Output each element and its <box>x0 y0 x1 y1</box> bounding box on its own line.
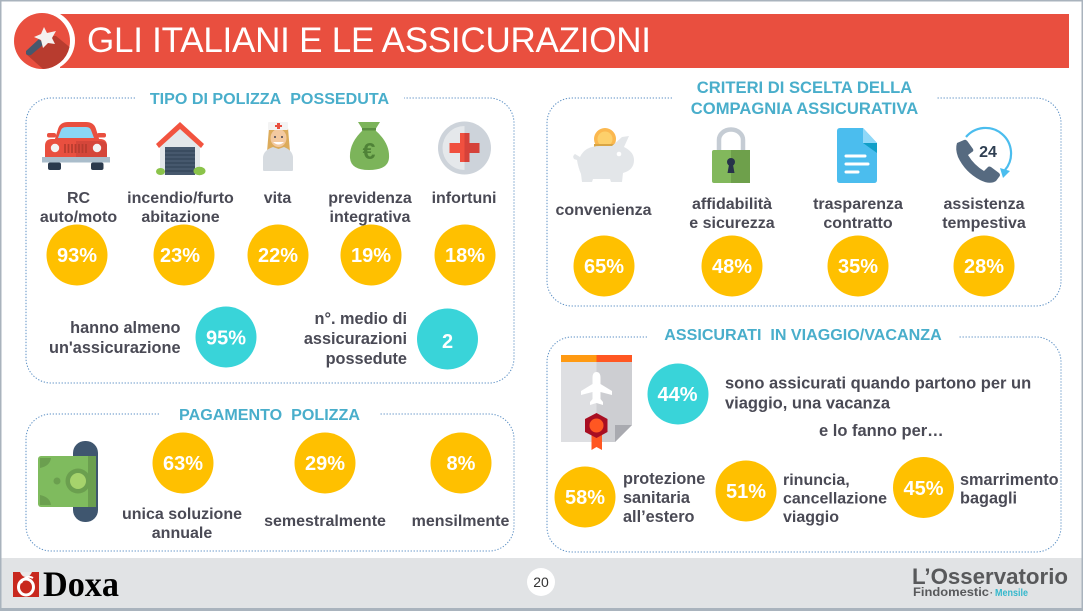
label: hanno almeno un'assicurazione: hanno almeno <box>70 319 180 337</box>
icon: money bag: € <box>363 138 376 164</box>
panel: assicurati in viaggio/vacanza <box>547 326 1061 552</box>
value: 23% <box>154 224 214 286</box>
label: unica soluzione annuale: annuale <box>152 525 212 542</box>
text: sono assicurati: sono assicurati quando partono per un <box>725 374 1031 392</box>
logo: L'Osservatorio Findomestic: L’Osservatorio <box>912 564 1068 589</box>
text: e lo fanno per: e lo fanno per… <box>819 422 944 440</box>
value: 8%: 8% <box>447 453 476 475</box>
value: 18% <box>434 224 496 286</box>
value: 65% <box>574 236 634 296</box>
label: RC auto/moto: auto/moto <box>40 209 117 226</box>
value: 8% <box>430 432 492 494</box>
value: 45%: 45% <box>903 478 944 500</box>
label: vita: vita <box>264 190 291 207</box>
label: rinuncia, cancellazione viaggio: cancellazione <box>783 490 887 508</box>
value: 29%: 29% <box>305 453 345 475</box>
value: 95%: 95% <box>206 328 246 350</box>
icon: car <box>42 122 110 170</box>
label: hanno almeno un'assicurazione: un'assicurazione <box>49 339 180 357</box>
value: 23%: 23% <box>160 245 200 267</box>
panel: tipo di polizza posseduta <box>26 90 514 383</box>
value: 29% <box>294 432 356 494</box>
label: trasparenza contratto: trasparenza <box>813 196 903 213</box>
value: 51% <box>716 460 776 522</box>
panel: pagamento polizza <box>26 406 514 551</box>
label: assistenza tempestiva: tempestiva <box>942 215 1026 232</box>
label: smarrimento bagagli: bagagli <box>960 490 1017 508</box>
value: 63% <box>152 432 214 494</box>
value: 93% <box>46 224 108 286</box>
label: semestralmente: semestralmente <box>264 513 386 530</box>
value: 2: 2 <box>442 331 453 353</box>
label: unica soluzione annuale: unica soluzione <box>122 506 242 523</box>
value: 44% <box>648 364 708 424</box>
logo: Doxa <box>13 564 119 604</box>
value: 58%: 58% <box>565 487 605 509</box>
icon: travel insurance document <box>561 355 632 450</box>
logo: L'Osservatorio Findomestic: Findomestic <box>913 585 989 599</box>
logo: L'Osservatorio Findomestic: · <box>990 588 993 598</box>
label: assistenza tempestiva: assistenza <box>944 196 1024 213</box>
logo: L'Osservatorio Findomestic: Mensile <box>995 587 1028 599</box>
value: 22% <box>248 224 308 286</box>
icon: piggy bank <box>573 128 634 182</box>
icon: phone 24h: 24 <box>979 144 997 161</box>
label: affidabilità e sicurezza: affidabilità <box>692 196 772 213</box>
value: 44%: 44% <box>657 384 698 406</box>
panel: criteri di scelta <box>547 78 1061 306</box>
page number <box>527 568 555 596</box>
heading: ASSICURATI IN VIAGGIO/VACANZA <box>664 326 942 344</box>
label: numero medio di assicurazioni: assicurazioni <box>304 330 407 348</box>
heading: TIPO DI POLIZZA POSSEDUTA <box>150 90 390 108</box>
label: incendio/furto abitazione: incendio/furto <box>127 190 234 207</box>
value: 28% <box>954 236 1014 296</box>
value: 22%: 22% <box>258 245 298 267</box>
label: infortuni: infortuni <box>432 190 496 207</box>
icon: first aid cross <box>438 122 491 174</box>
footer band <box>0 558 1083 611</box>
label: rinuncia, cancellazione viaggio: rinuncia, <box>783 472 850 489</box>
heading: CRITERI DI SCELTA DELLA <box>697 78 912 97</box>
logo: Doxa: Doxa <box>43 564 119 604</box>
heading: COMPAGNIA ASSICURATIVA <box>691 99 918 118</box>
value: 2 <box>417 308 478 370</box>
icon: nurse <box>263 122 293 171</box>
label: affidabilità e sicurezza: e sicurezza <box>689 215 775 232</box>
value: 48% <box>702 236 762 296</box>
label: protezione sanitaria all'estero: all’estero <box>623 508 695 526</box>
label: mensilmente: mensilmente <box>412 513 510 530</box>
icon: padlock <box>712 130 750 183</box>
value: 48%: 48% <box>712 256 752 278</box>
label: numero medio di assicurazioni: possedute <box>326 350 407 368</box>
title: GLI ITALIANI E LE ASSICURAZIONI <box>87 21 651 60</box>
label: RC auto/moto: RC <box>67 190 90 207</box>
value: 58% <box>554 466 616 528</box>
value: 19% <box>340 224 402 286</box>
value: 93%: 93% <box>57 245 97 267</box>
value: 65%: 65% <box>584 256 624 278</box>
label: trasparenza contratto: contratto <box>823 215 893 232</box>
label: protezione sanitaria all'estero: sanitaria <box>623 489 691 507</box>
label: rinuncia, cancellazione viaggio: viaggio <box>783 509 839 526</box>
icon: phone 24h <box>956 128 1011 183</box>
text: sono assicurati: viaggio, una vacanza <box>725 394 891 412</box>
value: 28%: 28% <box>964 256 1004 278</box>
label: incendio/furto abitazione: abitazione <box>141 209 220 226</box>
value: 45% <box>893 457 954 518</box>
header banner <box>13 10 1069 72</box>
value: 18%: 18% <box>445 245 485 267</box>
page number: 20 <box>533 574 549 590</box>
value: 19%: 19% <box>351 245 391 267</box>
label: smarrimento bagagli: smarrimento <box>960 471 1059 489</box>
icon: money bag <box>350 122 389 170</box>
value: 35% <box>828 236 888 296</box>
heading: PAGAMENTO POLIZZA <box>179 406 360 424</box>
icon: banknote <box>38 441 98 522</box>
label: previdenza integrativa: previdenza <box>328 190 412 207</box>
value: 95% <box>196 306 256 368</box>
value: 51%: 51% <box>726 481 766 503</box>
label: protezione sanitaria all'estero: protezione <box>623 470 705 488</box>
icon: house <box>156 122 206 175</box>
label: numero medio di assicurazioni: n°. medio di <box>315 310 407 328</box>
label: previdenza integrativa: integrativa <box>330 209 411 226</box>
icon: document <box>837 128 877 183</box>
icon: magic wand badge <box>14 13 70 69</box>
value: 63%: 63% <box>163 453 203 475</box>
value: 35%: 35% <box>838 256 878 278</box>
label: convenienza: convenienza <box>555 202 652 219</box>
